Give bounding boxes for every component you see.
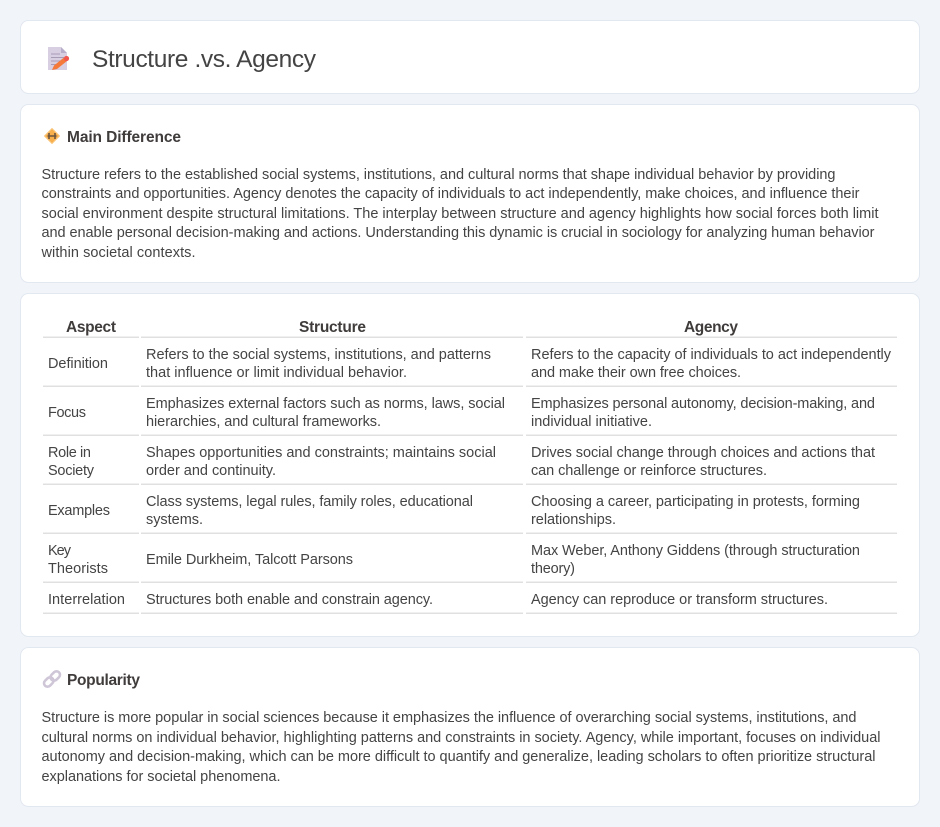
- text block: main difference: [40, 167, 878, 261]
- row: key theorists: Theorists: [48, 561, 108, 577]
- row: interrelation: Structures both enable and constrain agency.: [146, 592, 433, 608]
- panel: comparison table: [20, 294, 920, 636]
- row: role in society: can challenge or reinforce structures.: [531, 463, 767, 479]
- table header row: Structure: [299, 319, 366, 336]
- title: Structure .vs. Agency: [92, 46, 317, 73]
- row: definition: Definition: [48, 356, 108, 372]
- row: definition: that influence or limit individual behavior.: [146, 365, 407, 381]
- row: key theorists: Key: [48, 543, 72, 559]
- text block: popularity: explanations for societal phenomena.: [42, 769, 280, 785]
- row: key theorists: theory): [531, 561, 575, 577]
- text block: main difference: constraints and opportunities. Agency denotes the capacity of individuals to act independently, make choices, and influence their: [42, 186, 860, 202]
- row: focus: hierarchies, and cultural frameworks.: [146, 414, 381, 430]
- row: examples: Choosing a career, participating in protests, forming: [531, 494, 860, 510]
- row: key theorists: Max Weber, Anthony Giddens (through structuration: [531, 543, 860, 559]
- row: interrelation: [43, 592, 897, 614]
- icon: diamond sign: [44, 128, 60, 144]
- row: definition: Refers to the capacity of individuals to act independently: [531, 347, 892, 363]
- row: key theorists: [43, 543, 897, 583]
- text block: popularity: autonomy and decision-making, which can be more difficult to quantify and generalize, leading scholars to often prioritize structural: [42, 749, 876, 765]
- row: role in society: Role in: [48, 445, 91, 461]
- row: interrelation: Interrelation: [48, 592, 125, 608]
- table header row: Aspect: [66, 319, 116, 336]
- panel: main difference: [20, 104, 920, 282]
- heading: main difference: Main Difference: [67, 129, 181, 146]
- row: definition: Refers to the social systems, institutions, and patterns: [146, 347, 491, 363]
- icon: chain link: [43, 670, 61, 688]
- text block: popularity: cultural norms on individual behavior, highlighting patterns and constraints in society. Agency, while important, focuses on individual: [42, 730, 880, 746]
- text block: main difference: Structure refers to the established social systems, institutions, and cultural norms that shape individual behavior by providing: [42, 167, 836, 183]
- row: examples: systems.: [146, 512, 203, 528]
- row: definition: [43, 347, 897, 387]
- row: interrelation: Agency can reproduce or transform structures.: [531, 592, 828, 608]
- row: examples: Class systems, legal rules, family roles, educational: [146, 494, 473, 510]
- row: role in society: Shapes opportunities and constraints; maintains social: [146, 445, 496, 461]
- text block: main difference: social environment despite structural limitations. The interplay between structure and agency highlights how social forces both limit: [42, 206, 878, 222]
- row: focus: individual initiative.: [531, 414, 652, 430]
- row: focus: Emphasizes external factors such as norms, laws, social: [146, 396, 505, 412]
- row: focus: Emphasizes personal autonomy, decision-making, and: [531, 396, 875, 412]
- row: definition: and make their own free choices.: [531, 365, 741, 381]
- row: examples: relationships.: [531, 512, 616, 528]
- row: role in society: [43, 445, 897, 485]
- row: role in society: Society: [48, 463, 95, 479]
- panel: title card: [20, 20, 920, 94]
- row: focus: [43, 396, 897, 436]
- table header row: [43, 319, 897, 338]
- row: examples: Examples: [48, 503, 110, 519]
- panel: popularity: [20, 648, 920, 806]
- row: role in society: Drives social change through choices and actions that: [531, 445, 875, 461]
- row: key theorists: Emile Durkheim, Talcott Parsons: [146, 552, 353, 568]
- row: focus: Focus: [48, 405, 86, 421]
- text block: main difference: and enable personal decision-making and actions. Understanding this dynamic is crucial in sociology for analyzing human behavior: [42, 225, 875, 241]
- row: examples: [43, 494, 897, 534]
- heading: popularity: Popularity: [67, 672, 140, 689]
- icon: document with pencil: [48, 47, 69, 70]
- text block: main difference: within societal contexts.: [40, 245, 196, 261]
- text block: popularity: [42, 710, 880, 785]
- text block: popularity: Structure is more popular in social sciences because it emphasizes the influence of overarching social systems, institutions, and: [42, 710, 856, 726]
- row: role in society: order and continuity.: [146, 463, 276, 479]
- table header row: Agency: [684, 319, 738, 336]
